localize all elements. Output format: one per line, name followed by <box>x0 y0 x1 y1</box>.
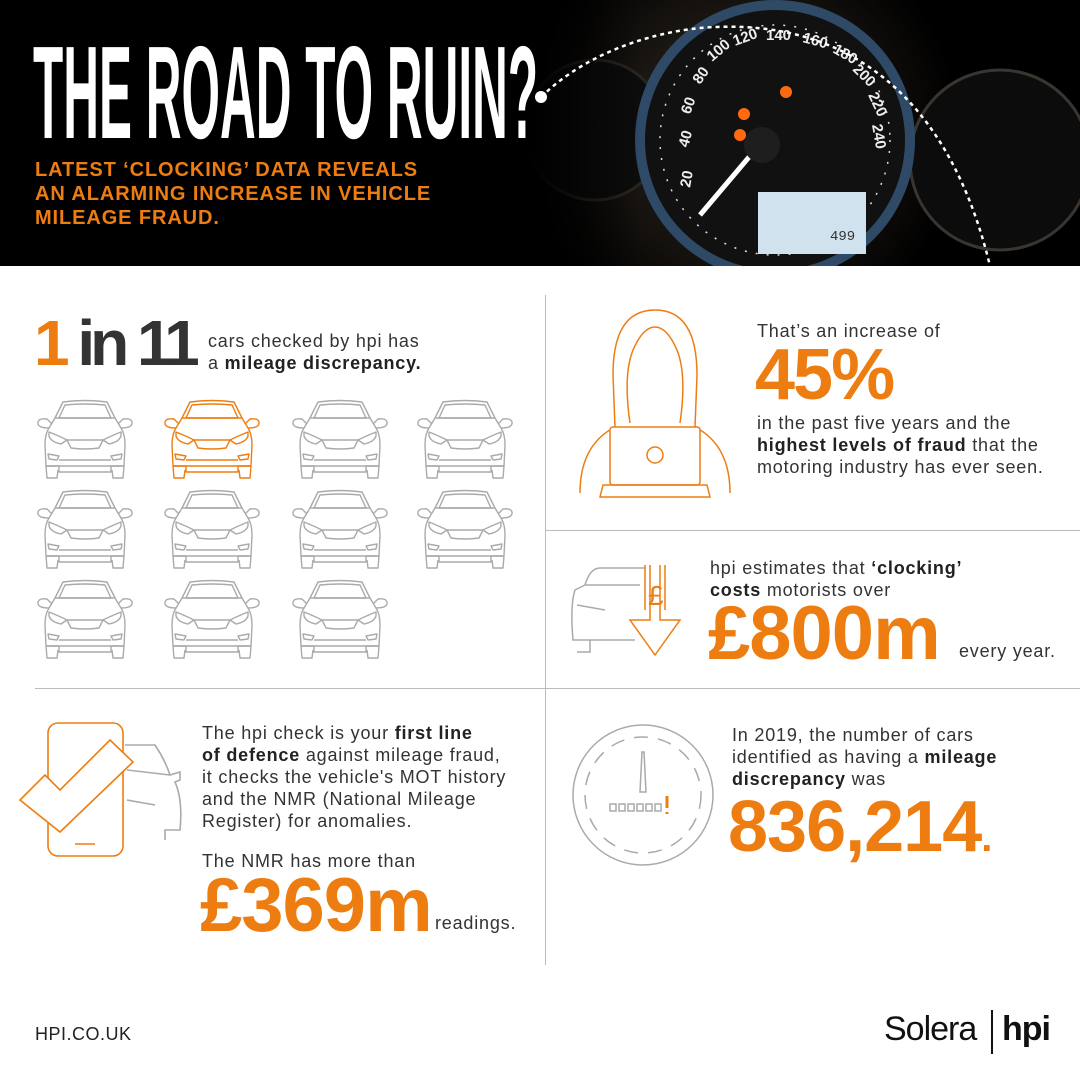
logo: solera hpi <box>884 1010 1050 1054</box>
text: cars checked: cars checked by hpi has <box>208 331 420 351</box>
stat: 1 in 11: 1 in 11 <box>34 307 195 379</box>
car grid <box>37 400 513 659</box>
speedometer image: 60 <box>678 95 699 116</box>
text: in 2019: identified as having a mileage <box>732 747 997 767</box>
text: cars checked <box>208 331 421 373</box>
speedometer image: 220 <box>864 90 890 119</box>
speedometer image: 20 <box>677 169 697 189</box>
panel: 45% increase <box>579 309 1044 498</box>
subtitle: AN ALARMING INCREASE IN VEHICLE <box>35 183 431 205</box>
text: past five years: highest levels of fraud that the <box>757 435 1039 455</box>
stat: £800m: £800m <box>708 591 940 676</box>
icon: car with pound arrow <box>571 565 682 656</box>
panel: 836,214 <box>572 724 997 867</box>
text: clocking costs <box>710 558 962 600</box>
header <box>0 0 1080 266</box>
text: clocking costs: hpi estimates that ‘clocking’ <box>710 558 962 578</box>
subtitle: LATEST ‘CLOCKING’ DATA REVEALS <box>35 159 418 181</box>
text: first line of defence: The hpi check is your first line <box>202 723 473 743</box>
logo: solera hpi: Solera <box>884 1010 976 1048</box>
icon: phone with tick <box>18 722 182 857</box>
speedometer image: 80 <box>689 64 713 87</box>
text: increase: That’s an increase of <box>757 321 941 341</box>
speedometer image: 140 <box>766 27 791 44</box>
text: first line of defence: and the NMR (National Mileage <box>202 789 476 809</box>
text: in 2019: In 2019, the number of cars <box>732 725 974 745</box>
text: first line of defence <box>202 723 506 831</box>
text: clocking costs: costs motorists over <box>710 580 891 600</box>
stat: £369m: £369m <box>200 863 432 948</box>
text: past five years: in the past five years and the <box>757 413 1011 433</box>
text: past five years: motoring industry has ever seen. <box>757 457 1044 477</box>
speedometer image: 100 <box>704 36 734 65</box>
speedometer image: 40 <box>675 129 696 149</box>
subtitle <box>35 159 431 229</box>
subtitle: MILEAGE FRAUD. <box>35 207 220 229</box>
text: first line of defence: it checks the vehicle's MOT history <box>202 767 506 787</box>
logo: solera hpi: hpi <box>1002 1010 1050 1048</box>
panel: £800m <box>571 558 1056 676</box>
speedometer image: 180 <box>830 41 860 68</box>
icon: gauge <box>572 724 714 866</box>
stat: 836,214: 836,214. <box>728 787 991 867</box>
text: past five years <box>757 413 1044 477</box>
panel: 1 in 11 <box>34 307 513 659</box>
speedometer image <box>552 0 1080 266</box>
text: every year: every year. <box>959 641 1056 661</box>
text: readings: readings. <box>435 913 516 933</box>
text: in 2019 <box>732 725 997 789</box>
dividers <box>545 295 546 965</box>
text: first line of defence: Register) for anomalies. <box>202 811 412 831</box>
speedometer image: 240 <box>868 123 889 150</box>
stat: 45%: 45% <box>755 335 893 415</box>
speedometer image: 499 <box>830 229 855 245</box>
title: THE ROAD TO RUIN? <box>33 19 538 166</box>
icon: car with pound arrow: £ <box>648 580 664 611</box>
text: first line of defence: of defence against mileage fraud, <box>202 745 501 765</box>
dotted arc <box>535 26 990 263</box>
text: NMR more than: The NMR has more than <box>202 851 416 871</box>
text: in 2019: discrepancy was <box>732 769 886 789</box>
speedometer image: 120 <box>731 25 760 50</box>
speedometer image: 200 <box>849 61 879 91</box>
text: cars checked: a mileage discrepancy. <box>208 353 421 373</box>
footer url: HPI.CO.UK <box>35 1024 132 1044</box>
speedometer image: 160 <box>801 29 830 52</box>
panel: hpi check <box>18 722 516 948</box>
icon: hooded hacker <box>579 309 731 498</box>
